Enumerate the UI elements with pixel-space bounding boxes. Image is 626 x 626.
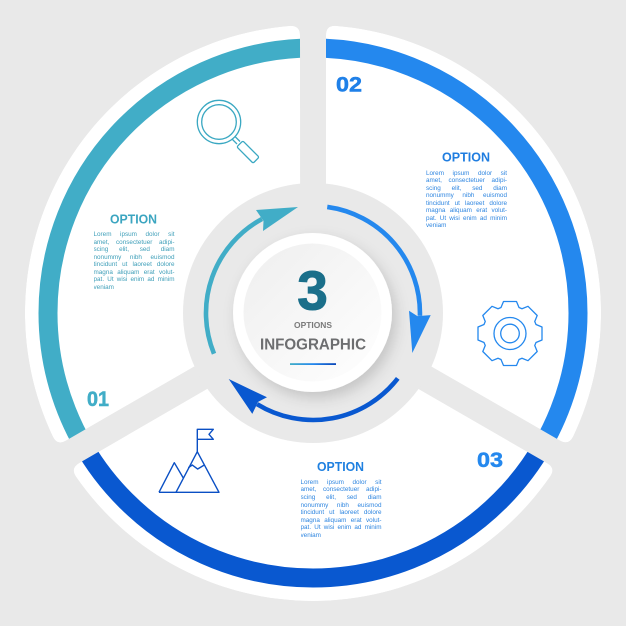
panel 01 segment and teal ring [25,26,300,442]
body text: option 02: pat. Ut wisi enim ad minim [426,215,507,222]
body text: option 01: veniam [94,284,114,291]
panel 03 segment and dark blue ring [74,389,552,601]
body text: option 03: tincidunt ut laoreet dolore [300,509,382,516]
number 01: 01 [87,388,109,411]
body text: option 02: nonummy nibh euismod [426,192,507,199]
body text: option 01: amet, consectetuer adipi- [94,239,174,246]
label: infographic: INFOGRAPHIC [260,336,366,354]
body text: option 03: magna aliquam erat volut- [300,517,382,524]
panel: option 01 [25,26,300,442]
body text: option 02: veniam [426,222,446,229]
disc inner face [244,244,382,382]
body text: option 02: Lorem ipsum dolor sit [426,170,507,176]
panel: option 02 [326,26,601,442]
body text: option 03: pat. Ut wisi enim ad minim [300,524,382,531]
heading: option 01: OPTION [110,212,157,226]
label: options: OPTIONS [294,320,332,330]
body text: option 03: amet, consectetuer adipi- [300,486,382,493]
number 02: 02 [336,74,362,96]
body text: option 01: magna aliquam erat volut- [94,269,174,276]
body text: option 01: nonummy nibh euismod [94,254,174,261]
body text: option 02 [426,170,508,232]
body text: option 02: scing elit, sed diam [426,185,507,192]
heading: option 02: OPTION [442,150,490,164]
underline [290,363,336,365]
arrow: dark blue cycle arrow [229,306,402,459]
body text: option 02: magna aliquam erat volut- [426,207,507,214]
arrow: blue cycle arrow [285,200,458,353]
body text: option 03 [300,479,382,541]
body text: option 01 [94,231,176,293]
body text: option 02: amet, consectetuer adipi- [426,177,507,184]
disc outer rim [233,233,392,392]
body text: option 02: tincidunt ut laoreet dolore [426,200,507,207]
center disc [233,233,392,392]
icon: magnifying glass [197,100,259,163]
icon: gear [478,302,542,366]
big number 3: 3 [297,260,328,322]
arrow: teal cycle arrow [206,207,298,354]
heading: option 03: OPTION [317,459,364,474]
number 03: 03 [477,449,503,472]
body text: option 03: scing elit, sed diam [300,494,382,501]
icon: mountain with flag [159,429,219,492]
body text: option 01: tincidunt ut laoreet dolore [94,261,174,268]
body text: option 03: veniam [300,532,321,539]
body text: option 01: Lorem ipsum dolor sit [94,231,174,238]
panel: option 03 [74,389,552,601]
body text: option 03: nonummy nibh euismod [300,502,382,509]
panel 02 segment and blue ring [326,26,601,442]
body text: option 01: pat. Ut wisi enim ad minim [94,276,174,283]
body text: option 01: scing elit, sed diam [94,246,174,253]
center hub background [183,183,443,443]
body text: option 03: Lorem ipsum dolor sit [300,479,382,486]
